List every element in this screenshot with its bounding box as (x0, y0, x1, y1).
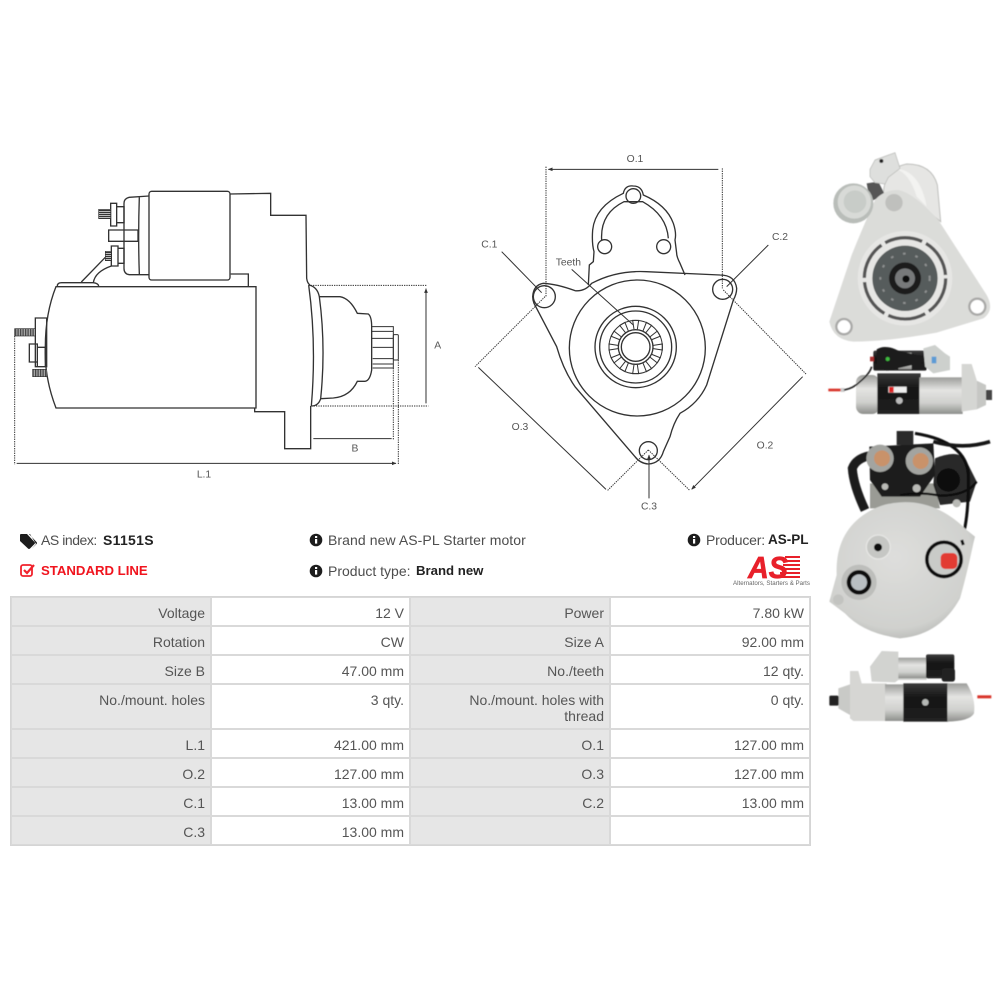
logo: AS: Alternators, Starters & Parts (733, 580, 810, 587)
producer (706, 532, 808, 548)
producer: Producer: (706, 532, 765, 548)
row: L.1, O.1 (11, 729, 810, 758)
row: voltage, power: 7.80 kW (753, 605, 804, 621)
specification table (11, 597, 810, 845)
row: C.1, C.2: C.1 (183, 795, 205, 811)
AS index (41, 532, 154, 548)
icon: tags (20, 534, 37, 549)
row: voltage, power (11, 597, 810, 626)
row: size B, teeth: No./teeth (547, 663, 604, 679)
row: O.2, O.3: 127.00 mm (334, 766, 404, 782)
photo: starter front view (829, 153, 990, 342)
row: rotation, size A: CW (381, 634, 404, 650)
row: C.3: 13.00 mm (342, 824, 404, 840)
row: voltage, power: 12 V (375, 605, 404, 621)
icon: info product type (310, 565, 322, 577)
product type (328, 563, 484, 579)
row: mounting holes (11, 684, 810, 729)
dimension lines A, B, L.1: B (352, 444, 359, 455)
solenoid (57, 191, 230, 286)
dimension lines: O.1 (627, 154, 644, 165)
icon: info producer (688, 534, 700, 546)
row: L.1, O.1: O.1 (581, 737, 604, 753)
row: rotation, size A: 92.00 mm (742, 634, 804, 650)
front view technical drawing (475, 154, 806, 513)
logo: AS (733, 550, 810, 587)
row: mounting holes: 3 qty. (371, 692, 404, 708)
dimension lines: C.3 (641, 502, 657, 513)
brand note: Brand new AS-PL Starter motor (328, 532, 526, 548)
dimension lines: O.2 (757, 441, 774, 452)
row: mounting holes: No./mount. holes with (469, 692, 604, 708)
mounting holes (533, 189, 733, 460)
row: O.2, O.3: 127.00 mm (734, 766, 804, 782)
pinion rings and teeth (569, 280, 705, 416)
row: mounting holes: thread (564, 708, 604, 724)
AS index: AS index: (41, 532, 97, 548)
icon: checkbox (21, 565, 34, 576)
row: O.2, O.3 (11, 758, 810, 787)
side view technical drawing (15, 191, 441, 481)
mounting flange outline (533, 271, 737, 464)
product type: Product type: (328, 563, 410, 579)
row: voltage, power: Power (564, 605, 604, 621)
row: L.1, O.1: 127.00 mm (734, 737, 804, 753)
dimension lines: C.1 (481, 239, 498, 250)
row: size B, teeth: Size B (165, 663, 205, 679)
AS index: S1151S (103, 532, 154, 548)
dimension lines: C.2 (772, 232, 788, 243)
row: mounting holes: No./mount. holes (99, 692, 205, 708)
producer: AS-PL (768, 532, 808, 547)
row: L.1, O.1: L.1 (186, 737, 205, 753)
row: C.1, C.2: 13.00 mm (342, 795, 404, 811)
dimension lines: Teeth (556, 257, 581, 268)
row: rotation, size A: Rotation (153, 634, 205, 650)
icon: info brand (310, 534, 322, 546)
logo: AS: AS (747, 550, 788, 585)
row: voltage, power: Voltage (158, 605, 205, 621)
row: L.1, O.1: 421.00 mm (334, 737, 404, 753)
row: C.3 (11, 816, 810, 845)
photo: starter rear view (829, 431, 990, 638)
dimension lines A, B, L.1 (15, 285, 441, 481)
row: O.2, O.3: O.2 (182, 766, 205, 782)
row: rotation, size A (11, 626, 810, 655)
dimension lines A, B, L.1: L.1 (197, 470, 211, 481)
row: size B, teeth: 47.00 mm (342, 663, 404, 679)
dimension lines (475, 154, 806, 513)
row: C.3: C.3 (183, 824, 205, 840)
motor body (15, 287, 256, 408)
drive housing and nose (230, 193, 398, 449)
row: C.1, C.2: 13.00 mm (742, 795, 804, 811)
row: C.1, C.2: C.2 (582, 795, 604, 811)
standard line label: STANDARD LINE (41, 563, 148, 578)
dimension lines A, B, L.1: A (434, 340, 441, 351)
solenoid outline (588, 186, 685, 285)
photo: starter side view reversed (829, 651, 991, 722)
row: size B, teeth: 12 qty. (763, 663, 804, 679)
dimension lines: O.3 (512, 422, 529, 433)
row: mounting holes: 0 qty. (771, 692, 804, 708)
photo: starter side view with black band (828, 345, 992, 414)
row: size B, teeth (11, 655, 810, 684)
row: C.1, C.2 (11, 787, 810, 816)
row: rotation, size A: Size A (564, 634, 604, 650)
row: O.2, O.3: O.3 (581, 766, 604, 782)
product type: Brand new (416, 563, 483, 578)
